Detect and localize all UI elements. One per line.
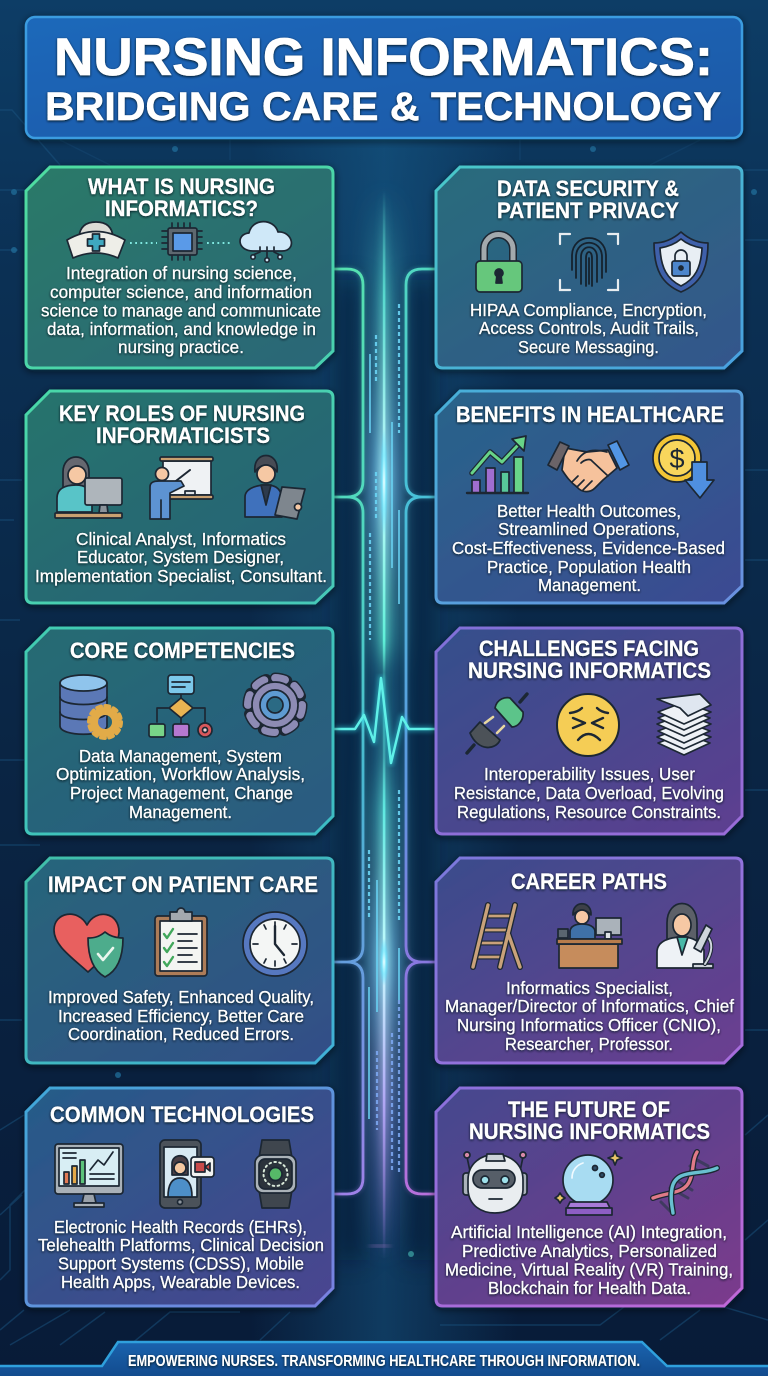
icon: DNA helix — [653, 1152, 717, 1213]
icon: shield — [654, 232, 708, 292]
heading: DATA SECURITY & — [497, 176, 679, 201]
body text: Educator, System Designer, — [77, 547, 284, 567]
connector rails — [334, 269, 435, 1194]
body text: HIPAA Compliance, Encryption, — [470, 300, 707, 320]
body text: Support Systems (CDSS), Mobile — [58, 1254, 304, 1274]
body text: Regulations, Resource Constraints. — [457, 802, 721, 822]
panel: core competencies — [26, 628, 333, 834]
icon: padlock — [476, 234, 522, 292]
body text: Manager/Director of Informatics, Chief — [445, 996, 734, 1016]
icon: smart watch — [255, 1140, 296, 1208]
panel: challenges — [436, 628, 742, 834]
icon: scientist with microscope — [657, 904, 713, 968]
heading: BENEFITS IN HEALTHCARE — [456, 402, 724, 427]
body text: Implementation Specialist, Consultant. — [35, 566, 327, 586]
heading: COMMON TECHNOLOGIES — [50, 1102, 314, 1127]
body text: Interoperability Issues, User — [484, 764, 695, 784]
body text: Informatics Specialist, — [506, 978, 673, 998]
icon: heart with shield — [54, 914, 123, 977]
body text — [445, 1222, 733, 1298]
heading: CORE COMPETENCIES — [70, 638, 295, 663]
body text: Optimization, Workflow Analysis, — [56, 764, 305, 784]
body text: Cost-Effectiveness, Evidence-Based — [452, 538, 725, 558]
icon: cloud — [240, 222, 291, 262]
body text: Streamlined Operations, — [498, 519, 680, 539]
footer text: EMPOWERING NURSES. TRANSFORMING HEALTHCARE THROUGH INFORMATION. — [128, 1353, 640, 1370]
body text: Management. — [129, 802, 232, 822]
body text: Access Controls, Audit Trails, — [479, 318, 699, 338]
heading: WHAT IS NURSING — [88, 174, 275, 199]
icon: gear — [248, 678, 302, 732]
heading — [497, 176, 679, 223]
body text: Management. — [538, 575, 641, 595]
title text: NURSING INFORMATICS: — [54, 28, 713, 87]
central light beam — [358, 190, 414, 1260]
body text: Secure Messaging. — [518, 337, 659, 357]
body text: Telehealth Platforms, Clinical Decision — [38, 1235, 324, 1255]
body text: Coordination, Reduced Errors. — [68, 1024, 294, 1044]
icon: desktop monitor — [55, 1144, 123, 1207]
body text: data, information, and knowledge in — [47, 319, 316, 339]
body text — [56, 746, 305, 822]
heading: NURSING INFORMATICS — [468, 658, 711, 683]
body text: Artificial Intelligence (AI) Integration, — [451, 1222, 727, 1242]
body text — [454, 764, 724, 822]
body text: Integration of nursing science, — [66, 263, 297, 283]
title banner — [26, 17, 742, 138]
icon: manager at desk — [557, 904, 622, 968]
icon: handshake — [548, 441, 629, 492]
body text — [470, 300, 707, 357]
icon: crystal ball — [555, 1151, 622, 1215]
heading — [469, 1097, 710, 1144]
icon text: dollar sign: $ — [669, 444, 685, 474]
body text — [452, 501, 725, 595]
heading — [59, 401, 305, 448]
heading — [88, 174, 275, 221]
heading: CHALLENGES FACING — [479, 636, 699, 661]
footer banner — [0, 1342, 768, 1376]
title text — [45, 28, 721, 129]
dotted links — [130, 242, 233, 244]
heartbeat line — [334, 678, 435, 763]
body text: Data Management, System — [79, 746, 282, 766]
heading: NURSING INFORMATICS — [469, 1119, 710, 1144]
body text: Practice, Population Health — [487, 557, 691, 577]
body text — [35, 529, 327, 586]
icon: frustrated face — [557, 694, 619, 756]
icon: nurse cap — [67, 222, 125, 258]
body text: Project Management, Change — [70, 783, 293, 803]
body text: Electronic Health Records (EHRs), — [54, 1217, 307, 1237]
panel: impact on patient care — [26, 858, 333, 1063]
body text: Researcher, Professor. — [505, 1034, 673, 1054]
body text — [445, 978, 734, 1054]
title text: BRIDGING CARE & TECHNOLOGY — [45, 85, 721, 129]
body text — [38, 1217, 324, 1292]
icon: chip — [162, 223, 202, 260]
body text: Medicine, Virtual Reality (VR) Training, — [445, 1260, 733, 1280]
heading — [468, 636, 711, 683]
icon: database with gear — [60, 675, 121, 738]
body text: Resistance, Data Overload, Evolving — [454, 783, 724, 803]
panel: key roles — [26, 391, 333, 603]
icon: clock — [243, 912, 307, 976]
body text: Blockchain for Health Data. — [488, 1278, 691, 1298]
icon: coin with down arrow — [653, 434, 714, 498]
icon: disconnected plug — [467, 694, 527, 753]
icon: analyst at computer — [55, 457, 122, 518]
icon: clipboard checklist — [155, 908, 207, 976]
data streaks — [369, 304, 399, 1173]
body text: Nursing Informatics Officer (CNIO), — [457, 1015, 721, 1035]
icon: growth chart — [467, 436, 528, 493]
icon: workflow diagram — [149, 675, 212, 737]
body text: computer science, and information — [50, 282, 312, 302]
body text: Clinical Analyst, Informatics — [76, 529, 286, 549]
icon: robot head — [463, 1152, 527, 1213]
body text: Better Health Outcomes, — [497, 501, 681, 521]
panel: benefits — [436, 391, 742, 603]
body text: Improved Safety, Enhanced Quality, — [48, 987, 314, 1007]
icon: telehealth phone — [160, 1140, 214, 1208]
panel: data security — [436, 167, 742, 368]
heading: INFORMATICS? — [105, 196, 258, 221]
icon: consultant with tablet — [245, 456, 305, 519]
icon: educator at board — [150, 457, 213, 519]
heading: IMPACT ON PATIENT CARE — [48, 872, 318, 897]
panel: common technologies — [26, 1088, 333, 1306]
panel: the future — [436, 1088, 742, 1306]
body text — [41, 263, 321, 357]
icon: ladder — [473, 905, 520, 967]
body text — [48, 987, 314, 1044]
body text: Predictive Analytics, Personalized — [462, 1241, 717, 1261]
body text: science to manage and communicate — [41, 300, 321, 320]
panel: career paths — [436, 858, 742, 1063]
heading: INFORMATICISTS — [96, 423, 270, 448]
heading: CAREER PATHS — [511, 869, 667, 894]
icon: paper stack — [657, 694, 711, 755]
heading: THE FUTURE OF — [508, 1097, 670, 1122]
panel: what is nursing informatics — [26, 167, 333, 368]
body text: nursing practice. — [118, 337, 244, 357]
heading: KEY ROLES OF NURSING — [59, 401, 305, 426]
icon: fingerprint — [560, 234, 618, 290]
heading: PATIENT PRIVACY — [497, 198, 679, 223]
body text: Health Apps, Wearable Devices. — [61, 1272, 300, 1292]
body text: Increased Efficiency, Better Care — [58, 1006, 304, 1026]
